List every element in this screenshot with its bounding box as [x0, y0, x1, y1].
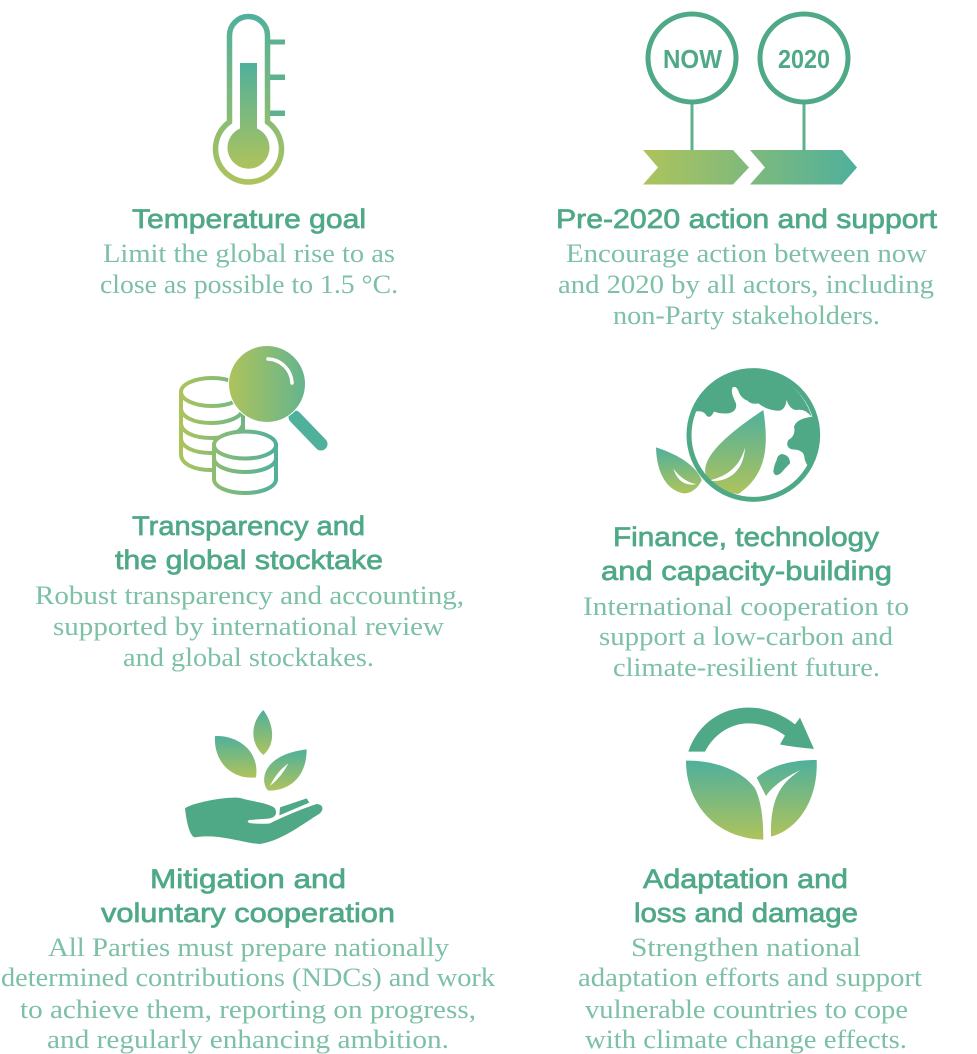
icon: timeline now to 2020: 2020 — [778, 44, 830, 74]
heading: finance, technology and capacity-building: Finance, technology — [613, 522, 880, 552]
text: mitigation description — [1, 932, 496, 1054]
heading: mitigation and voluntary cooperation: voluntary cooperation — [101, 898, 395, 928]
text: temperature goal description: Limit the global rise to as — [103, 238, 395, 268]
text: transparency description: Robust transparency and accounting, — [35, 580, 464, 610]
panel: transparency — [35, 345, 464, 672]
text: temperature goal description: close as possible to 1.5 °C. — [100, 269, 398, 299]
heading: adaptation and loss and damage: Adaptation and — [643, 864, 848, 894]
text: temperature goal description — [100, 238, 398, 299]
text: adaptation description: adaptation efforts and support — [578, 962, 923, 992]
text: transparency description — [35, 580, 464, 672]
icon: coins and magnifier — [181, 345, 321, 493]
text: adaptation description: with climate change effects. — [585, 1024, 907, 1054]
heading: finance, technology and capacity-building — [601, 522, 892, 586]
heading: finance, technology and capacity-building: and capacity-building — [601, 556, 892, 586]
heading: adaptation and loss and damage — [634, 864, 858, 928]
icon: thermometer — [216, 16, 285, 182]
icon: globe with leaves — [656, 371, 818, 499]
text: finance description: support a low-carbon and — [599, 621, 893, 651]
text: finance description — [583, 591, 909, 682]
text: mitigation description: determined contributions (NDCs) and work — [1, 962, 496, 992]
panel: pre-2020 action — [556, 14, 938, 330]
text: transparency description: supported by international review — [53, 611, 445, 641]
panel: adaptation — [578, 708, 923, 1054]
text: finance description: climate-resilient future. — [613, 652, 880, 682]
heading: transparency and the global stocktake — [115, 511, 383, 575]
text: transparency description: and global stocktakes. — [123, 642, 374, 672]
text: mitigation description: to achieve them, reporting on progress, — [20, 994, 476, 1024]
text: mitigation description: All Parties must prepare nationally — [48, 932, 450, 962]
icon: timeline now to 2020: NOW — [663, 44, 722, 74]
text: pre-2020 description: non-Party stakeholders. — [613, 300, 880, 330]
heading: transparency and the global stocktake: Transparency and — [132, 511, 365, 541]
text: pre-2020 description — [558, 238, 934, 330]
text: adaptation description: vulnerable countries to cope — [585, 994, 908, 1024]
text: mitigation description: and regularly enhancing ambition. — [47, 1024, 449, 1054]
heading: mitigation and voluntary cooperation — [101, 864, 395, 928]
text: pre-2020 description: and 2020 by all actors, including — [558, 269, 934, 299]
icon: cycling arrow over leaves — [686, 708, 817, 840]
heading: pre-2020 action and support: Pre-2020 action and support — [556, 204, 938, 234]
text: finance description: International cooperation to — [583, 591, 909, 621]
text: pre-2020 description: Encourage action between now — [566, 238, 928, 268]
heading: adaptation and loss and damage: loss and damage — [634, 898, 858, 928]
heading: mitigation and voluntary cooperation: Mitigation and — [150, 864, 346, 894]
heading: temperature goal: Temperature goal — [132, 204, 366, 234]
icon: timeline now to 2020 — [643, 14, 857, 184]
panel: finance — [583, 371, 909, 682]
text: adaptation description — [578, 932, 923, 1054]
text: adaptation description: Strengthen national — [631, 932, 861, 962]
icon: hand with leaves — [185, 710, 322, 844]
panel: temperature goal — [100, 16, 398, 299]
panel: mitigation — [1, 710, 496, 1054]
heading: transparency and the global stocktake: the global stocktake — [115, 545, 383, 575]
